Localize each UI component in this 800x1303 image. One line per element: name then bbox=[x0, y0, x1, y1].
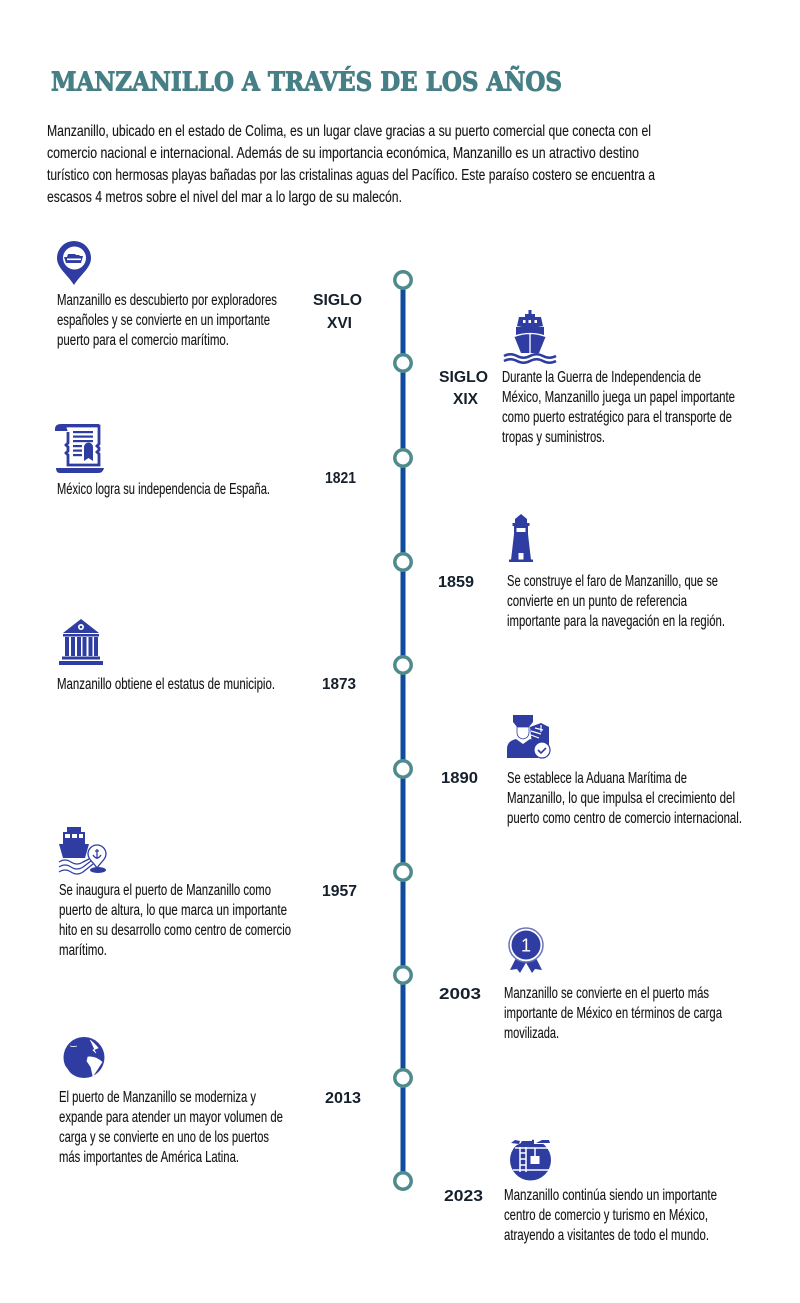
event text: Durante la Guerra de Independencia de bbox=[502, 369, 701, 386]
year label: XVI bbox=[327, 315, 352, 332]
event text: Manzanillo continúa siendo un importante bbox=[504, 1187, 717, 1204]
icon: port with crane bbox=[509, 1139, 552, 1180]
year label: XIX bbox=[453, 391, 478, 408]
event text bbox=[504, 1187, 717, 1244]
event text bbox=[507, 573, 725, 630]
year label bbox=[439, 369, 488, 408]
icon: location pin with ship bbox=[57, 241, 91, 285]
year label: 2023 bbox=[444, 1188, 483, 1205]
event: 1821 bbox=[55, 424, 356, 498]
year label: 1957 bbox=[322, 883, 357, 900]
icon: first place medal: 1 bbox=[521, 936, 531, 956]
icon: scroll document bbox=[55, 424, 104, 473]
year label: 2013 bbox=[325, 1090, 361, 1107]
year label bbox=[313, 292, 362, 332]
event text: Se establece la Aduana Marítima de bbox=[507, 770, 687, 787]
event text: españoles y se convierte en un importante bbox=[57, 312, 270, 329]
event text: Manzanillo obtiene el estatus de municipio. bbox=[57, 676, 275, 693]
event text: El puerto de Manzanillo se moderniza y bbox=[59, 1089, 256, 1106]
event: siglo XVI bbox=[57, 241, 362, 349]
event text: centro de comercio y turismo en México, bbox=[504, 1207, 708, 1224]
event: 1890 bbox=[441, 715, 742, 827]
icon: first place medal bbox=[509, 928, 543, 973]
year label: 1859 bbox=[438, 574, 474, 591]
event text: marítimo. bbox=[59, 942, 107, 959]
icon: customs officer bbox=[507, 715, 550, 758]
timeline axis bbox=[395, 272, 411, 1189]
year label: 1873 bbox=[322, 676, 356, 693]
intro text block bbox=[47, 123, 655, 206]
intro text block: Manzanillo, ubicado en el estado de Colima, es un lugar clave gracias a su puerto comercial que conecta con el bbox=[47, 123, 651, 140]
event: 1859 bbox=[438, 514, 725, 630]
event text: puerto para el comercio marítimo. bbox=[57, 332, 229, 349]
event: 1957 bbox=[59, 827, 357, 959]
event text bbox=[59, 882, 291, 959]
year label: 2003 bbox=[439, 986, 481, 1003]
event text: tropas y suministros. bbox=[502, 429, 605, 446]
year label: 1821 bbox=[325, 470, 356, 487]
event text: puerto de altura, lo que marca un importante bbox=[59, 902, 287, 919]
year label: 1890 bbox=[441, 770, 478, 787]
event text bbox=[59, 1089, 283, 1166]
event text: atrayendo a visitantes de todo el mundo. bbox=[504, 1227, 709, 1244]
icon: government building bbox=[59, 619, 103, 665]
event text bbox=[507, 770, 742, 827]
year label: SIGLO bbox=[313, 292, 362, 309]
event text bbox=[57, 292, 277, 349]
event text: carga y se convierte en uno de los puertos bbox=[59, 1129, 269, 1146]
event text bbox=[502, 369, 735, 446]
event text: México logra su independencia de España. bbox=[57, 481, 270, 498]
icon: cargo ship and anchor pin bbox=[59, 827, 106, 874]
event text: Se construye el faro de Manzanillo, que se bbox=[507, 573, 718, 590]
event: 2013 bbox=[59, 1037, 361, 1166]
title: MANZANILLO A TRAVÉS DE LOS AÑOS bbox=[51, 66, 562, 98]
event text: más importantes de América Latina. bbox=[59, 1149, 239, 1166]
event: 2023 bbox=[444, 1139, 717, 1244]
event: 2003 bbox=[439, 928, 722, 1042]
event text: importante para la navegación en la región. bbox=[507, 613, 725, 630]
event: siglo XIX bbox=[439, 310, 735, 446]
year label: SIGLO bbox=[439, 369, 488, 386]
event text: Manzanillo se convierte en el puerto más bbox=[504, 985, 709, 1002]
icon: globe bbox=[64, 1037, 104, 1078]
intro text block: escasos 4 metros sobre el nivel del mar a lo largo de su malecón. bbox=[47, 189, 402, 206]
event text: Manzanillo es descubierto por exploradores bbox=[57, 292, 277, 309]
intro text block: comercio nacional e internacional. Además de su importancia económica, Manzanillo es un atractivo destino bbox=[47, 145, 639, 162]
icon: ship on waves bbox=[504, 310, 556, 363]
event text: movilizada. bbox=[504, 1025, 559, 1042]
event text: importante de México en términos de carga bbox=[504, 1005, 722, 1022]
event: 1873 bbox=[57, 619, 356, 693]
event text: convierte en un punto de referencia bbox=[507, 593, 687, 610]
event text: Se inaugura el puerto de Manzanillo como bbox=[59, 882, 271, 899]
event text: hito en su desarrollo como centro de comercio bbox=[59, 922, 291, 939]
event text bbox=[504, 985, 722, 1042]
event text: expande para atender un mayor volumen de bbox=[59, 1109, 283, 1126]
icon: lighthouse bbox=[509, 514, 533, 562]
